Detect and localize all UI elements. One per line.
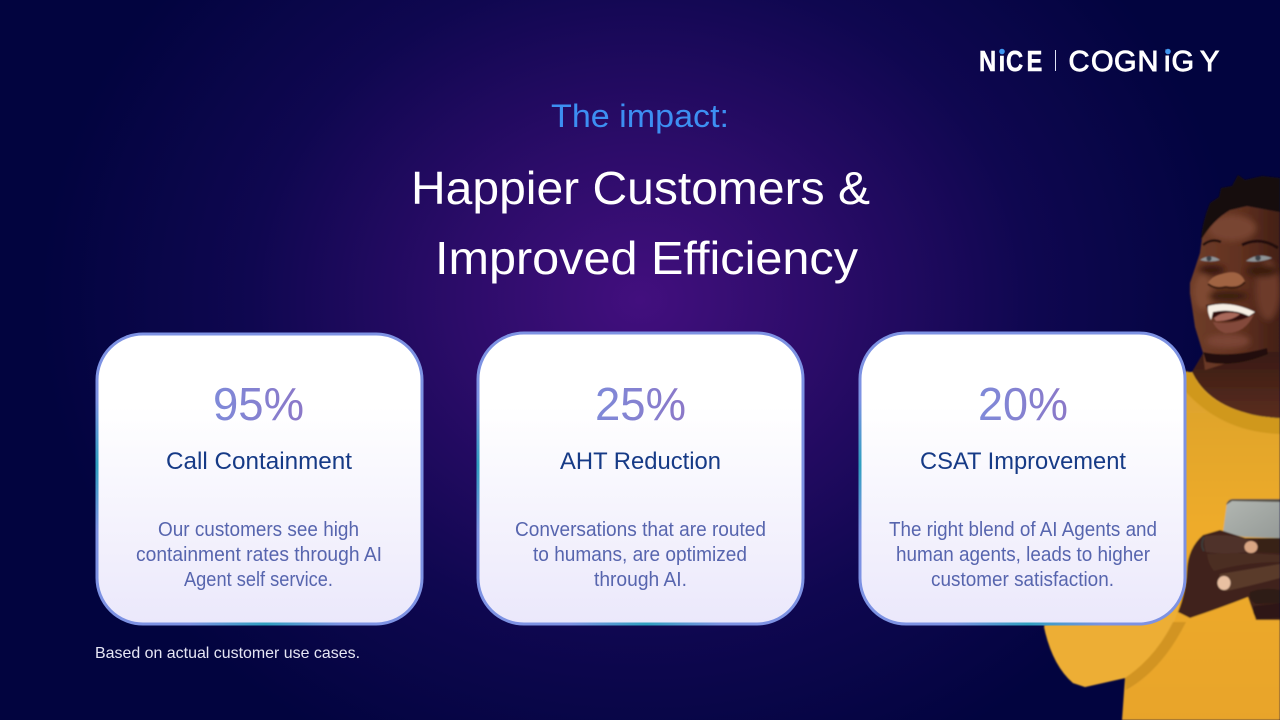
beard (1203, 348, 1268, 364)
title (411, 162, 870, 284)
card description: Agent self service. (184, 569, 333, 591)
logo: NiCE | Cognigy (979, 45, 1219, 78)
eyes (1200, 256, 1220, 262)
teal border accents (858, 400, 862, 530)
title: Improved Efficiency (435, 232, 858, 284)
card description: Our customers see high (158, 519, 359, 541)
card description: customer satisfaction. (931, 569, 1114, 591)
hand (1178, 530, 1280, 620)
brows (1203, 241, 1221, 245)
logo: NiCE | Cognigy: COGNiGY (1068, 46, 1219, 78)
panel: call containment (96, 334, 422, 626)
sweater collar (1186, 371, 1280, 434)
card description: through AI. (594, 569, 687, 591)
card description: Conversations that are routed (515, 519, 766, 541)
mouth (1206, 304, 1256, 321)
stat: 95%: 95% (213, 378, 304, 430)
nose (1208, 272, 1245, 287)
card heading: Call Containment (166, 448, 352, 475)
lower lip (1213, 314, 1254, 333)
card description: to humans, are optimized (533, 544, 747, 566)
tongue (1214, 313, 1240, 321)
card description: human agents, leads to higher (896, 544, 1150, 566)
face (1190, 206, 1280, 370)
sweater sleeve (1044, 605, 1180, 687)
neck (1192, 340, 1280, 418)
hair (1201, 175, 1280, 240)
sleeve fold shadow (1125, 622, 1186, 690)
logo: NiCE | Cognigy: NiCE (979, 45, 1042, 78)
sweater body (1044, 372, 1280, 720)
card heading: AHT Reduction (560, 448, 721, 475)
card description (136, 519, 382, 591)
teal border accents (476, 400, 480, 530)
card heading: CSAT Improvement (920, 448, 1126, 475)
teeth (1208, 304, 1255, 320)
facial shading (1194, 215, 1280, 348)
panel: CSAT improvement (858, 333, 1185, 626)
fingers (1204, 535, 1250, 554)
stat: 20%: 20% (978, 378, 1068, 430)
eyebrow heading: The impact: (551, 98, 729, 134)
photo: smiling man with phone (1044, 175, 1280, 720)
footnote: Based on actual customer use cases. (95, 645, 360, 662)
card description (889, 519, 1157, 591)
card description (515, 519, 766, 591)
ring (1202, 537, 1204, 551)
nostril shadow (1208, 282, 1245, 288)
card description: The right blend of AI Agents and (889, 519, 1157, 541)
card description: containment rates through AI (136, 544, 382, 566)
title: Happier Customers & (411, 162, 870, 214)
stat: 25%: 25% (595, 378, 686, 430)
fingernails (1244, 541, 1258, 553)
phone (1223, 499, 1280, 538)
teal border accents (96, 400, 98, 530)
panel: AHT reduction (476, 333, 803, 626)
